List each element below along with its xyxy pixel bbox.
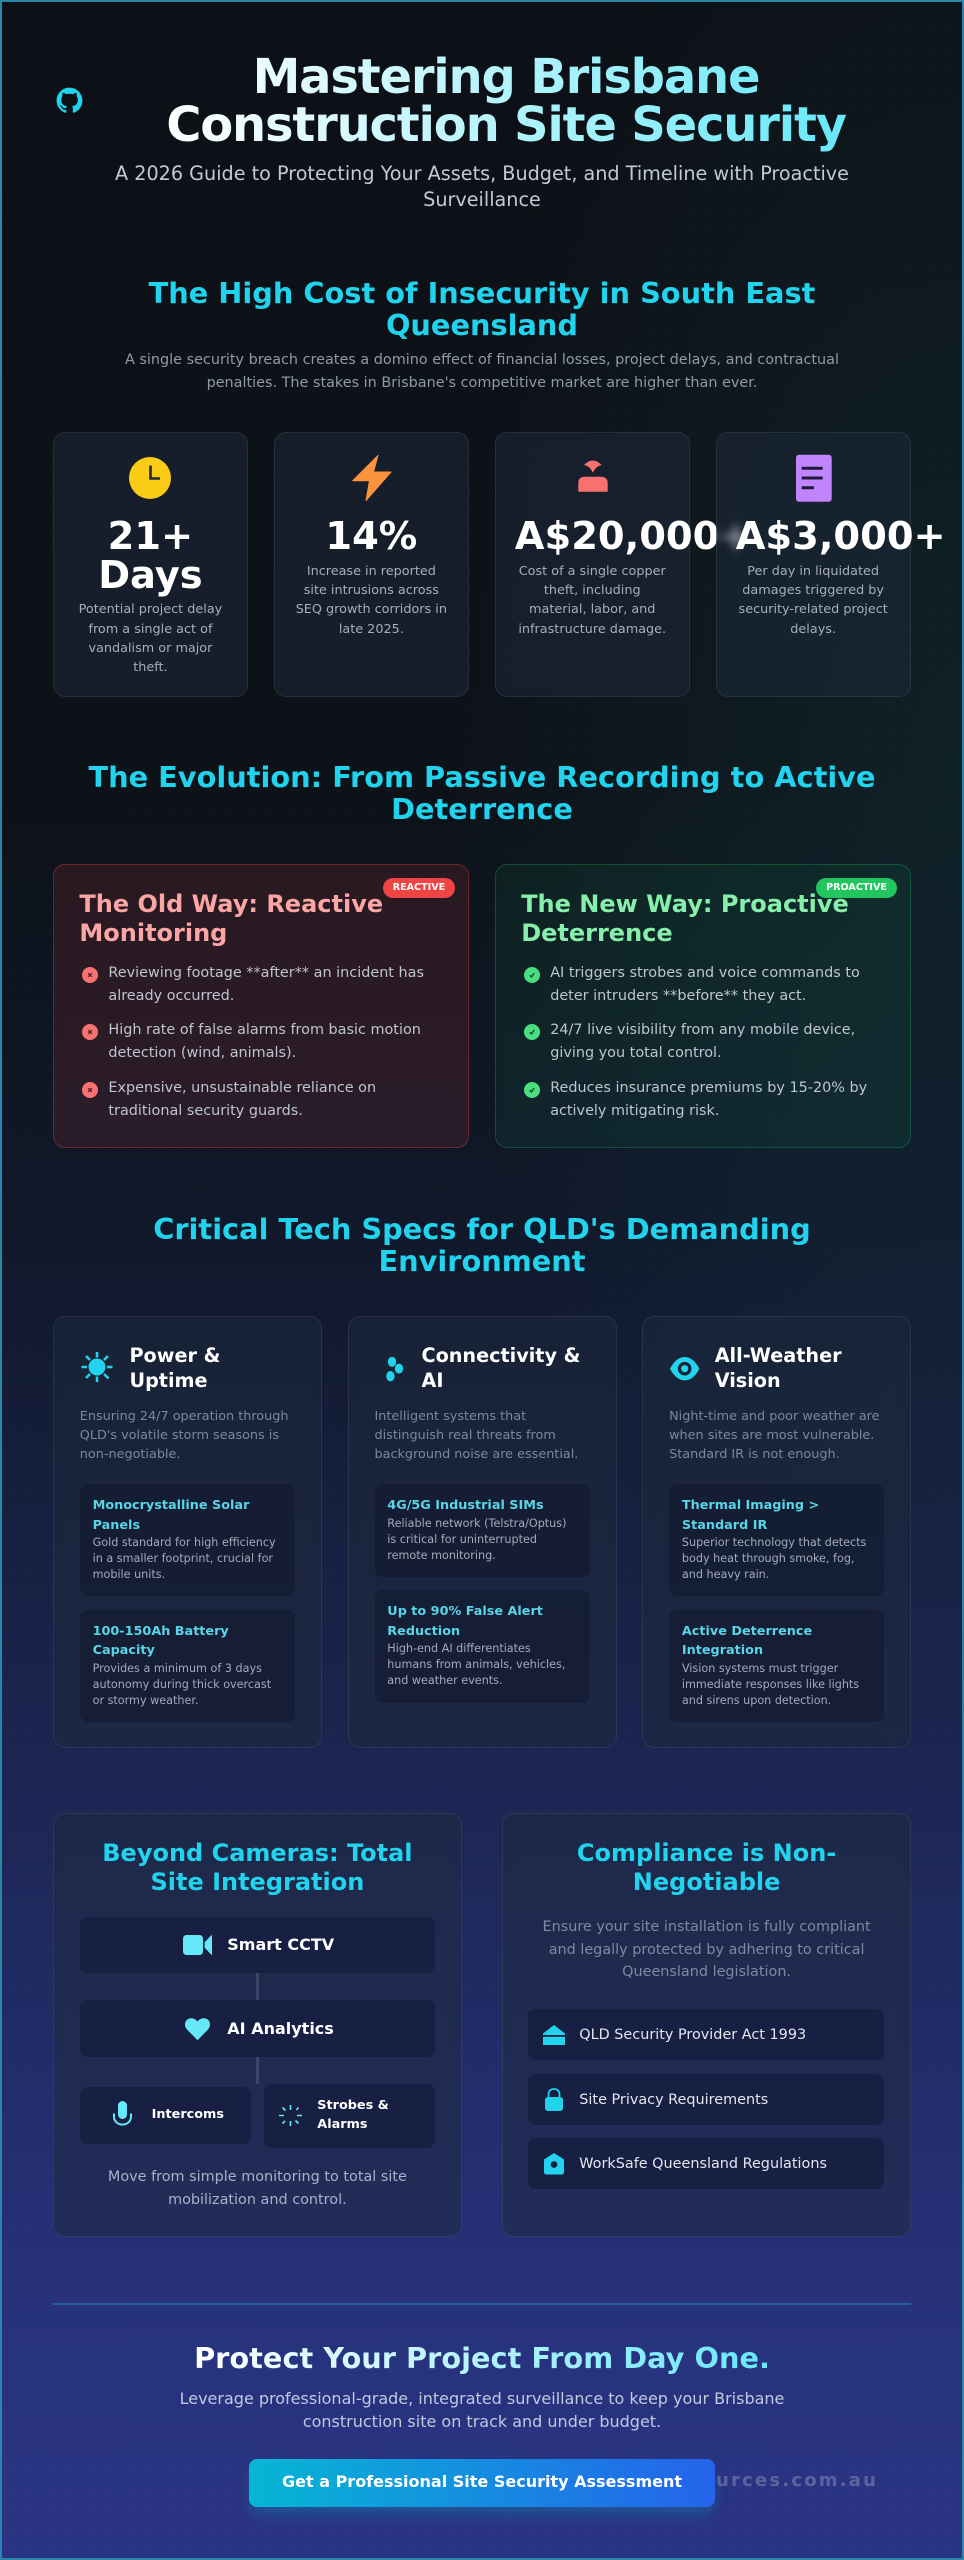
stat description: Increase in reported (307, 564, 436, 579)
label: Site Privacy Requirements (579, 2092, 768, 2108)
spec box: active deterrence (669, 1610, 884, 1722)
stat description (739, 564, 888, 637)
panel heading (502, 1839, 911, 1897)
stat description: security-related project (739, 602, 888, 617)
icon: video (183, 1935, 212, 1955)
label: AI Analytics (227, 2019, 334, 2038)
spec box: false alerts: humans from animals, vehicles, (387, 1658, 565, 1671)
spec box: SIMs: 4G/5G Industrial SIMs (387, 1498, 544, 1513)
bullet text: already occurred. (108, 988, 234, 1004)
spec box: solar: mobile units. (93, 1568, 165, 1581)
bullet icon: check (524, 1024, 540, 1040)
spec box: solar: in a smaller footprint, crucial for (93, 1552, 273, 1565)
spec box: active deterrence: Active Deterrence (682, 1624, 812, 1639)
stat description: from a single act of (88, 622, 212, 636)
bullet text (550, 964, 860, 1004)
heading: evolution (88, 760, 876, 826)
bullet text: 24/7 live visibility from any mobile device, (550, 1022, 855, 1038)
old way heading: Monitoring (79, 919, 227, 947)
spec box: battery: Capacity (93, 1643, 155, 1658)
spec box: battery: Provides a minimum of 3 days (93, 1662, 262, 1675)
stat card: copper theft (495, 432, 690, 697)
card description: Intelligent systems that (374, 1409, 526, 1424)
footer heading: Protect Your Project From Day One. (194, 2341, 770, 2375)
card description: Ensuring 24/7 operation through (80, 1409, 288, 1424)
node: strobes and alarms (264, 2084, 435, 2148)
panel heading: Negotiable (633, 1868, 780, 1896)
spec box: false alerts: Reduction (387, 1624, 460, 1638)
label: QLD Security Provider Act 1993 (579, 2027, 806, 2043)
stat description: Per day in liquidated (747, 564, 879, 579)
card title: AI (422, 1369, 444, 1392)
label: WorkSafe Queensland Regulations (579, 2156, 827, 2172)
heading: tech specs (153, 1212, 811, 1278)
label: Smart CCTV (227, 1935, 334, 1954)
subtitle: Surveillance (423, 188, 541, 211)
bullet text: AI triggers strobes and voice commands to (550, 964, 860, 980)
spec box: solar: Panels (93, 1518, 140, 1532)
spec box: thermal: and heavy rain. (682, 1568, 769, 1581)
watermark: urces.com.au (716, 2470, 878, 2491)
panel: connectivity and AI (348, 1316, 616, 1748)
panel caption: Move from simple monitoring to total site (108, 2169, 407, 2185)
stat description: delays. (790, 622, 836, 637)
bullet text: High rate of false alarms from basic motion (108, 1022, 421, 1038)
header icon: github (56, 88, 82, 113)
stat description: theft. (133, 660, 168, 675)
panel heading: Compliance is Non- (577, 1839, 836, 1867)
title: Construction Site Security (166, 97, 846, 153)
stat description (79, 602, 222, 675)
badge: proactive: PROACTIVE (826, 882, 887, 893)
node: AI analytics (80, 2000, 435, 2057)
icon: strobe (279, 2104, 302, 2127)
node: smart CCTV (80, 1917, 435, 1973)
footer text: construction site on track and under budget. (303, 2412, 661, 2431)
heading: evolution: Deterrence (391, 792, 573, 826)
stat description: vandalism or major (88, 641, 212, 656)
card description (669, 1409, 880, 1462)
card title (714, 1344, 842, 1392)
spec box: thermal (669, 1484, 884, 1596)
title: Mastering Brisbane (253, 49, 759, 105)
badge: reactive (383, 878, 455, 898)
panel: old way (53, 864, 469, 1148)
spec box: active deterrence: and sirens upon detection. (682, 1694, 831, 1707)
icon: document (796, 454, 832, 502)
bullet text: Reduces insurance premiums by 15-20% by (550, 1080, 867, 1096)
stat description: Potential project delay (79, 602, 222, 617)
stat description (518, 564, 666, 637)
old way heading: The Old Way: Reactive (79, 890, 383, 918)
stat description: site intrusions across (304, 583, 439, 598)
icon: sun (82, 1352, 112, 1382)
item: worksafe (528, 2138, 884, 2189)
spec box: thermal: Standard IR (682, 1518, 767, 1532)
connector (256, 1973, 259, 2000)
card title: All-Weather (715, 1344, 842, 1367)
card description: when sites are most vulnerable. (669, 1428, 874, 1443)
spec box: false alerts: and weather events. (387, 1674, 503, 1687)
card description: Standard IR is not enough. (669, 1447, 840, 1462)
stat description: infrastructure damage. (518, 622, 666, 637)
bullet text (550, 1022, 855, 1061)
card title: Vision (715, 1369, 781, 1392)
call to action button: Get a Professional Site Security Assessment (282, 2472, 682, 2491)
old way heading (79, 890, 383, 947)
bullet text: deter intruders **before** they act. (550, 988, 806, 1004)
panel heading (102, 1839, 413, 1896)
card title: Uptime (129, 1369, 208, 1392)
call to action button (249, 2459, 715, 2507)
new way heading: The New Way: Proactive (521, 890, 849, 918)
stat description: Cost of a single copper (519, 564, 666, 579)
spec box: active deterrence: Vision systems must trigger (682, 1662, 838, 1675)
subtitle (115, 162, 849, 211)
spec box: thermal: Thermal Imaging > (682, 1498, 819, 1513)
item: privacy (528, 2074, 884, 2125)
icon: eye (670, 1357, 700, 1380)
intro text: A single security breach creates a domino effect of financial losses, project delays, and contractual (125, 352, 839, 368)
panel heading: Site Integration (150, 1868, 364, 1896)
bullet text: actively mitigating risk. (550, 1102, 719, 1118)
icon: person (578, 460, 608, 492)
node: intercoms (80, 2087, 251, 2144)
footer text (0, 2387, 964, 2433)
stat description: theft, including (544, 583, 641, 598)
stat value (98, 514, 203, 598)
spec box: battery: 100-150Ah Battery (93, 1624, 229, 1639)
subtitle: A 2026 Guide to Protecting Your Assets, Budget, and Timeline with Proactive (115, 162, 849, 185)
bullet text: traditional security guards. (108, 1102, 303, 1118)
spec box: battery: or stormy weather. (93, 1694, 199, 1707)
stat value: 14% (325, 514, 417, 559)
panel: total site integration (53, 1813, 462, 2237)
card description (374, 1409, 578, 1462)
panel: compliance (502, 1813, 911, 2237)
bullet text (108, 964, 424, 1004)
panel: all-weather vision (642, 1316, 911, 1748)
card description: non-negotiable. (80, 1447, 180, 1462)
panel heading: Beyond Cameras: Total (102, 1839, 413, 1867)
badge: reactive: REACTIVE (393, 882, 445, 893)
icon: nodes (386, 1356, 404, 1382)
bullet text: Expensive, unsustainable reliance on (108, 1080, 376, 1096)
heading: evolution: The Evolution: From Passive Recording to Active (88, 760, 876, 794)
icon: clock (129, 457, 171, 499)
spec box: active deterrence: Integration (682, 1643, 763, 1658)
spec box: solar: Monocrystalline Solar (93, 1498, 249, 1513)
bullet text: giving you total control. (550, 1045, 722, 1061)
bullet text (108, 1022, 421, 1061)
icon: microphone (113, 2101, 132, 2126)
spec box: SIMs (374, 1484, 590, 1577)
bullet text (550, 1080, 867, 1118)
spec box: false alerts: Up to 90% False Alert (387, 1604, 543, 1619)
panel caption: mobilization and control. (168, 2192, 347, 2208)
panel: new way (495, 864, 911, 1148)
bullet icon: cross (82, 967, 98, 983)
new way heading (521, 890, 849, 947)
stat card: intrusions (274, 432, 469, 697)
stat description: damages triggered by (742, 583, 884, 598)
spec box: false alerts: High-end AI differentiates (387, 1642, 531, 1655)
bullet icon: check (524, 967, 540, 983)
spec box: false alerts (374, 1590, 590, 1702)
icon: building (543, 2025, 565, 2045)
bullet text (108, 1080, 376, 1118)
intro text: penalties. The stakes in Brisbane's competitive market are higher than ever. (207, 375, 757, 391)
stat card: liquidated damages (716, 432, 911, 697)
stat description: SEQ growth corridors in (296, 602, 447, 617)
stat description: material, labor, and (529, 602, 655, 617)
heading: tech specs: Critical Tech Specs for QLD's Demanding (153, 1212, 811, 1246)
label: Intercoms (152, 2107, 224, 2122)
icon: safety house (544, 2153, 564, 2174)
heading: tech specs: Environment (378, 1244, 586, 1278)
card description: background noise are essential. (374, 1447, 578, 1462)
stat card: delay (53, 432, 248, 697)
panel description: and legally protected by adhering to critical (549, 1942, 864, 1958)
icon: lock (545, 2088, 563, 2111)
card title: Connectivity & (422, 1344, 580, 1367)
spec box: solar (80, 1484, 295, 1596)
badge: proactive (816, 878, 897, 898)
card title (422, 1344, 580, 1392)
panel description: Queensland legislation. (622, 1964, 791, 1980)
spec box: SIMs: is critical for uninterrupted (387, 1533, 537, 1546)
icon: bolt (352, 455, 392, 501)
icon: heart (185, 2018, 210, 2040)
spec box: battery (80, 1610, 295, 1722)
bullet icon: cross (82, 1024, 98, 1040)
spec box: thermal: body heat through smoke, fog, (682, 1552, 854, 1565)
card title (129, 1344, 220, 1392)
intro text (125, 352, 839, 391)
panel description (502, 1916, 911, 1984)
heading: high cost (148, 276, 815, 342)
bullet icon: cross (82, 1082, 98, 1098)
card title: Power & (129, 1344, 220, 1367)
label: Strobes & (317, 2098, 389, 2113)
stat value: 21+ (108, 514, 193, 559)
spec box: battery: autonomy during thick overcast (93, 1678, 271, 1691)
footer text: Leverage professional-grade, integrated surveillance to keep your Brisbane (180, 2389, 784, 2408)
stat value: A$3,000+ (736, 514, 946, 559)
label (317, 2096, 389, 2134)
panel description: Ensure your site installation is fully compliant (542, 1919, 871, 1935)
spec box: active deterrence: immediate responses like lights (682, 1678, 859, 1691)
card description (80, 1409, 288, 1462)
bullet text: detection (wind, animals). (108, 1045, 296, 1061)
stat description: late 2025. (339, 622, 404, 637)
card description: distinguish real threats from (374, 1428, 556, 1443)
spec box: SIMs: Reliable network (Telstra/Optus) (387, 1517, 566, 1530)
card description: QLD's volatile storm seasons is (80, 1428, 279, 1443)
heading: high cost: The High Cost of Insecurity in South East (149, 276, 815, 310)
stat description (296, 564, 447, 637)
bullet icon: check (524, 1082, 540, 1098)
stat value: Days (98, 553, 203, 598)
label: Alarms (317, 2117, 368, 2132)
stat value: A$20,000+ (515, 514, 752, 559)
spec box: SIMs: remote monitoring. (387, 1549, 496, 1562)
panel caption (53, 2166, 462, 2212)
panel: power and uptime (53, 1316, 322, 1748)
connector (256, 2057, 259, 2084)
item: security provider act (528, 2009, 884, 2060)
heading: high cost: Queensland (386, 308, 578, 342)
spec box: solar: Gold standard for high efficiency (93, 1536, 276, 1549)
bullet text: Reviewing footage **after** an incident has (108, 964, 424, 980)
card description: Night-time and poor weather are (669, 1409, 880, 1424)
spec box: thermal: Superior technology that detects (682, 1536, 866, 1549)
new way heading: Deterrence (521, 919, 673, 947)
title (165, 53, 847, 157)
